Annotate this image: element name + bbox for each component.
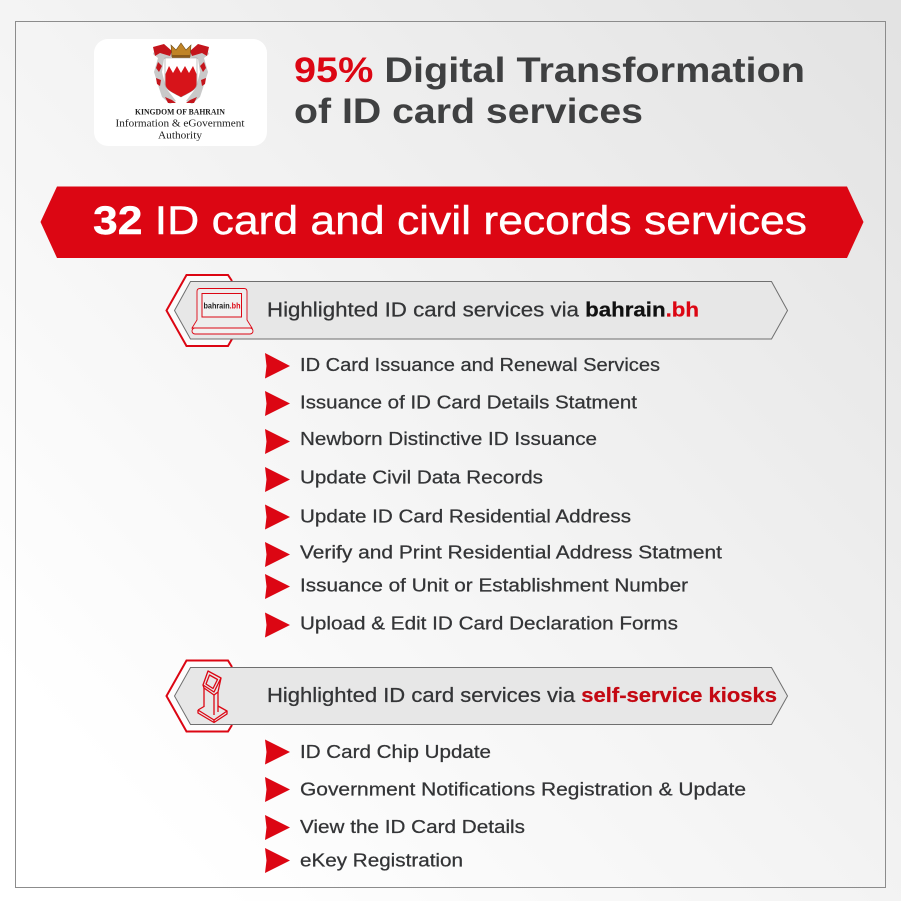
list: Issuance of ID Card Details Statment [300, 392, 637, 412]
title: of ID card services [294, 92, 643, 131]
list: eKey Registration [300, 850, 463, 870]
hexagon badge [166, 275, 232, 346]
list: View the ID Card Details [300, 816, 525, 837]
logo text: Information & eGovernment [116, 118, 245, 130]
list: Update ID Card Residential Address [300, 506, 631, 526]
list [265, 353, 722, 638]
list: ID Card Issuance and Renewal Services [300, 354, 660, 375]
header bar [174, 282, 788, 339]
list: Verify and Print Residential Address Statment [300, 542, 722, 562]
icon: Bahrain coat of arms [153, 43, 209, 104]
list: Newborn Distinctive ID Issuance [300, 428, 597, 449]
hexagon badge [166, 660, 232, 732]
list: Upload & Edit ID Card Declaration Forms [300, 612, 678, 634]
panel: bahrain.bh services [166, 275, 788, 638]
list: Government Notifications Registration & Update [300, 778, 746, 800]
list: Update Civil Data Records [300, 466, 543, 488]
logo text: Authority [158, 130, 203, 142]
banner: 32 services [40, 186, 864, 258]
panel: logo card [94, 39, 267, 146]
banner: 32 services: 32 ID card and civil records services [93, 199, 807, 243]
header text: Highlighted ID card services via self-service kiosks [267, 685, 777, 707]
list: Issuance of Unit or Establishment Number [300, 574, 688, 596]
title: 95% Digital Transformation [294, 51, 805, 90]
header text: Highlighted ID card services via bahrain .bh [267, 300, 699, 322]
icon: laptop [192, 288, 253, 334]
list [265, 740, 746, 873]
panel: self-service kiosks [166, 660, 788, 873]
list: ID Card Chip Update [300, 741, 491, 762]
icon: laptop: bahrain.bh [204, 300, 240, 310]
logo text [116, 106, 245, 142]
header bar [174, 668, 788, 724]
logo text: KINGDOM OF BAHRAIN [135, 106, 226, 116]
title [294, 51, 805, 131]
icon: kiosk [198, 671, 227, 722]
